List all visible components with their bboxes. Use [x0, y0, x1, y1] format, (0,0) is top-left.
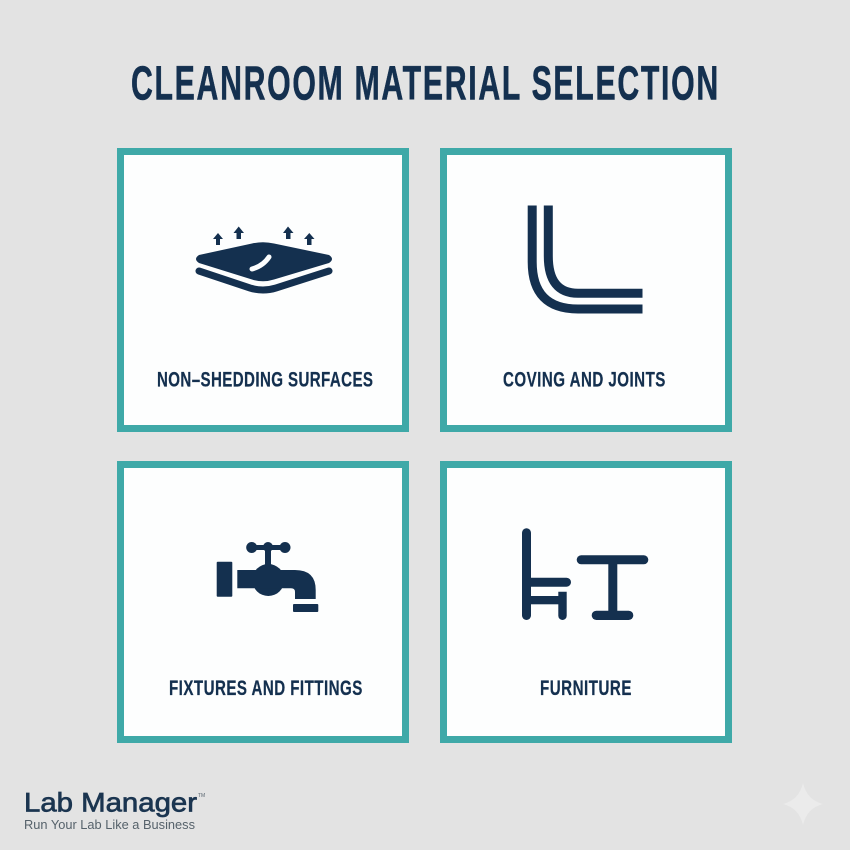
label: non-shedding surfaces: NON–SHEDDING SURFACES: [157, 367, 373, 391]
logo: Lab Manager: [24, 788, 205, 832]
icon: sparkle: [783, 783, 823, 825]
panel: fixtures and fittings: [120, 464, 406, 740]
icon: coving profile: [532, 206, 642, 309]
panel: coving and joints: [444, 152, 728, 428]
panel: furniture: [444, 464, 728, 740]
label: fixtures and fittings: FIXTURES AND FITTINGS: [169, 675, 362, 700]
icon: faucet: [217, 542, 318, 612]
logo: Lab Manager: Lab Manager: [24, 788, 197, 818]
title: CLEANROOM MATERIAL SELECTION: [131, 58, 718, 110]
panel: non-shedding surfaces: [120, 152, 406, 428]
label: coving and joints: COVING AND JOINTS: [503, 367, 665, 391]
logo: Lab Manager: Run Your Lab Like a Business: [24, 817, 195, 832]
label: furniture: FURNITURE: [540, 675, 631, 700]
logo: Lab Manager: TM: [198, 793, 205, 799]
icon: non-shedding surface: [196, 226, 332, 290]
icon: chair and table: [522, 528, 648, 620]
